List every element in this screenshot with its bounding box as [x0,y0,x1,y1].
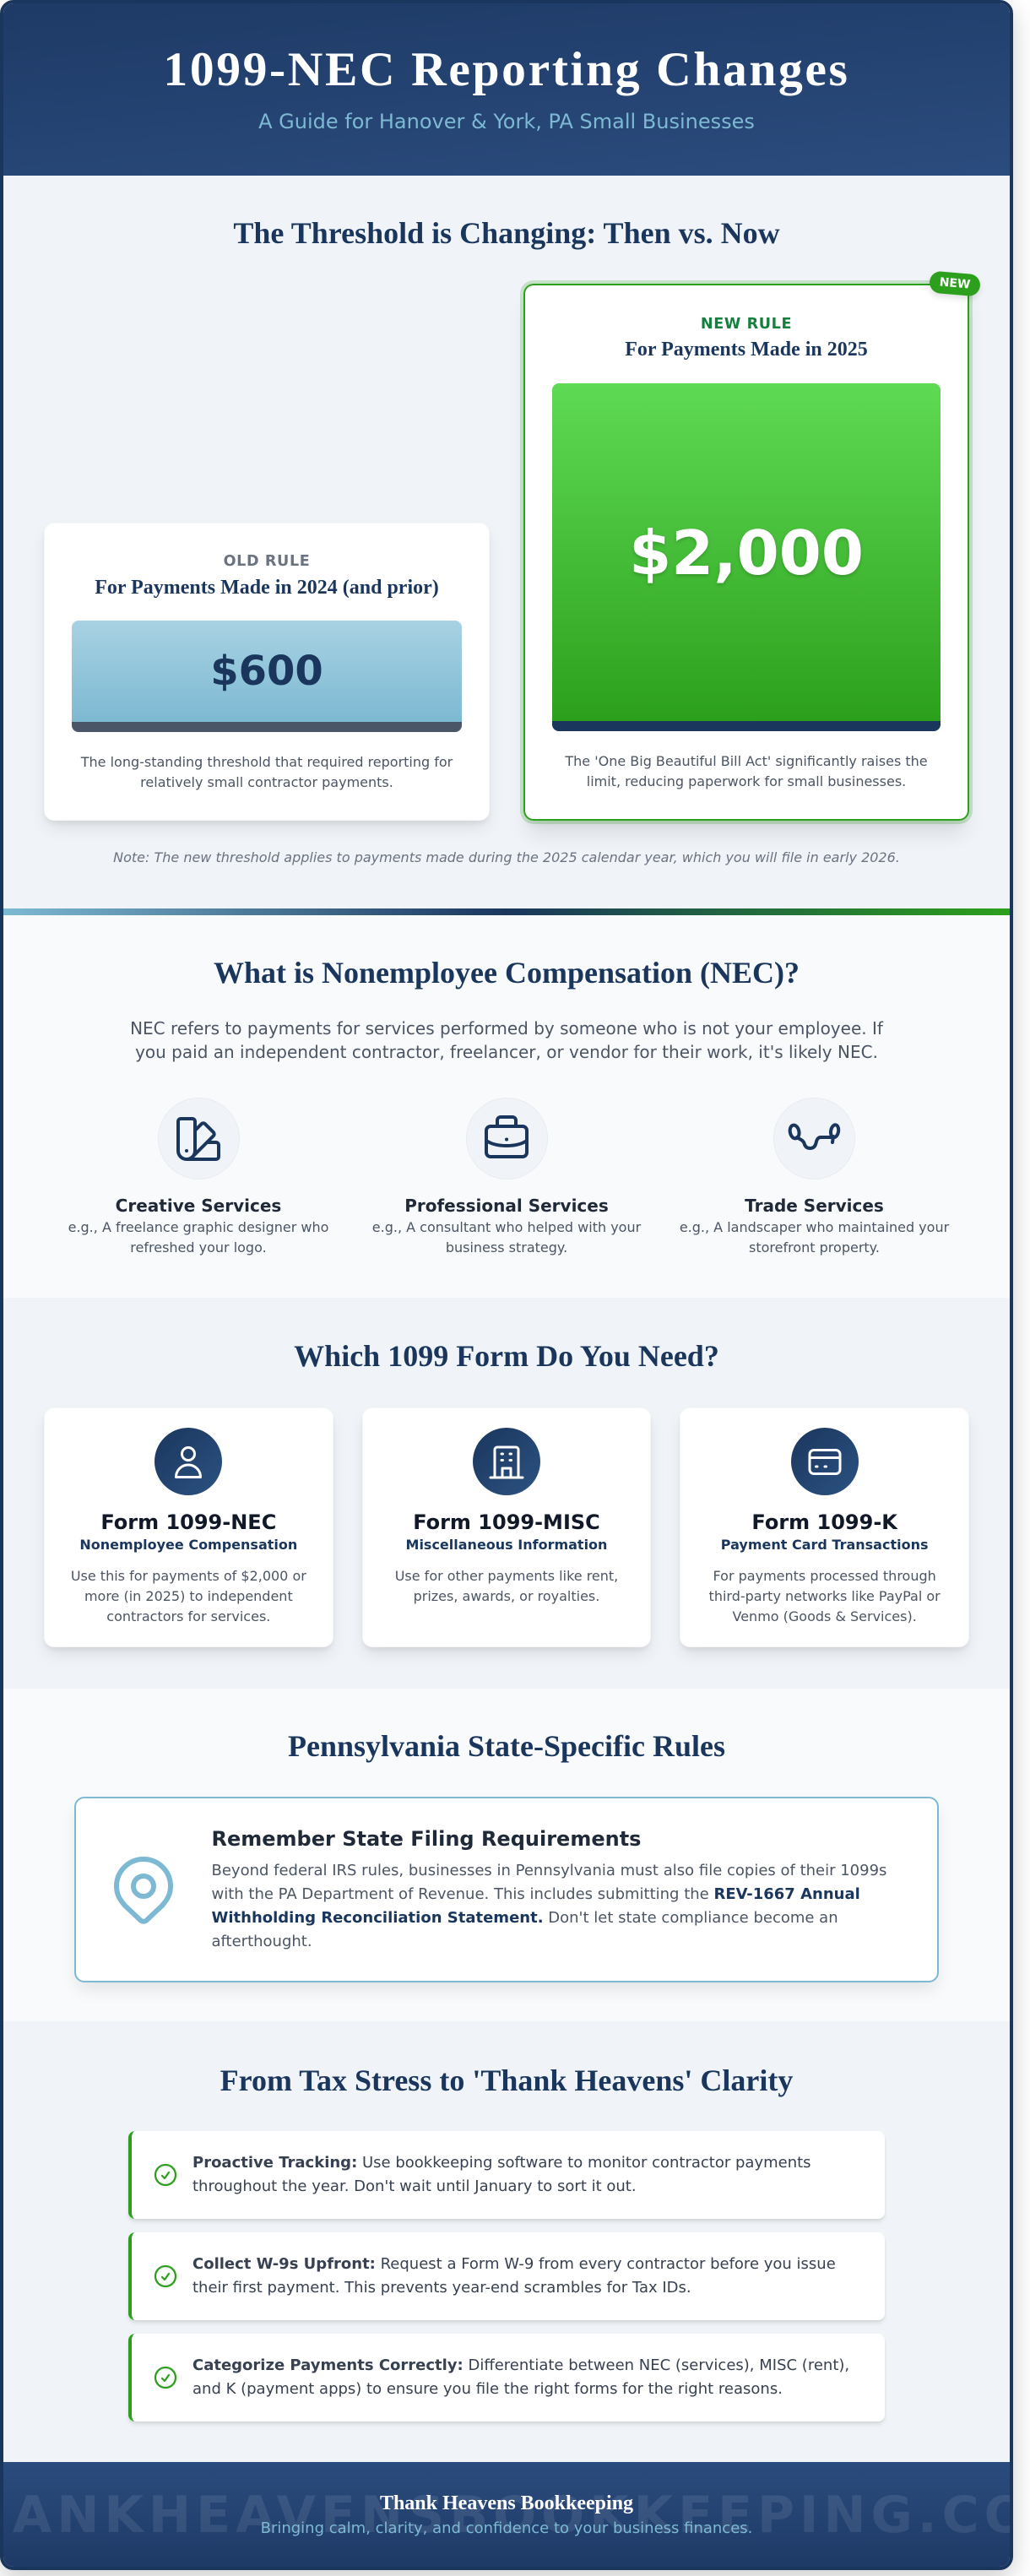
title: 1099-NEC Reporting Changes [163,43,850,96]
form description: contractors for services. [106,1608,270,1624]
icon: person [154,1428,222,1495]
icon: trade services [773,1098,855,1180]
icon: building [473,1428,540,1495]
form description: more (in 2025) to independent [84,1588,293,1604]
heading: NEC: What is Nonemployee Compensation (NEC)? [214,956,800,990]
bar: $2,000: $2,000 [629,518,864,588]
heading: forms: Which 1099 Form Do You Need? [294,1339,719,1373]
form name: Form 1099-K [751,1510,897,1534]
tip: collect W-9s: Collect W-9s Upfront: Request a Form W-9 from every contractor before you issue [192,2255,836,2273]
callout: state filing [74,1797,939,1982]
old rule label: OLD RULE [224,553,310,570]
card: form 1099-K [680,1407,969,1647]
trade services name: Trade Services [745,1196,884,1216]
form description: Use this for payments of $2,000 or [71,1568,306,1584]
form subtitle: Miscellaneous Information [406,1537,607,1553]
callout body: afterthought. [211,1933,312,1950]
footer [3,2462,1010,2567]
old rule description: relatively small contractor payments. [140,774,393,790]
callout body: Beyond federal IRS rules, businesses in Pennsylvania must also file copies of their 1099s [211,1862,886,1879]
professional services example [372,1219,642,1255]
new rule description: limit, reducing paperwork for small businesses. [587,773,906,789]
panel: which form [3,1298,1010,1689]
panel: new rule card [523,284,969,821]
intro paragraph [130,1018,883,1062]
panel: old rule card [44,523,490,821]
new rule label: NEW RULE [701,316,792,333]
tip: collect W-9s: their first payment. This prevents year-end scrambles for Tax IDs. [192,2279,691,2297]
form description [709,1568,941,1624]
header banner [3,3,1010,176]
form description [71,1568,306,1624]
callout body: with the PA Department of Revenue. This includes submitting the REV-1667 Annual [211,1885,860,1903]
new rule description [565,753,928,789]
heading: threshold: The Threshold is Changing: Then vs. Now [233,216,780,250]
old rule description: The long-standing threshold that required reporting for [81,754,453,770]
heading: clarity: From Tax Stress to 'Thank Heavens' Clarity [220,2064,793,2097]
form subtitle: Payment Card Transactions [721,1537,929,1553]
panel: Pennsylvania rules [3,1689,1010,2021]
card: form 1099-NEC [44,1407,333,1647]
new badge: NEW [939,275,971,292]
creative services example: refreshed your logo. [130,1239,267,1255]
bar: $600: $600 [210,648,323,695]
brand name: Thank Heavens Bookkeeping [380,2492,633,2514]
trade services example: e.g., A landscaper who maintained your [680,1219,949,1235]
tagline: Bringing calm, clarity, and confidence to your business finances. [261,2519,752,2537]
trade services example [680,1219,949,1255]
tip: categorize payments: and K (payment apps) to ensure you file the right forms for the right reasons. [192,2380,783,2398]
panel: what is NEC [3,915,1010,1298]
professional services example: e.g., A consultant who helped with your [372,1219,641,1235]
trade services example: storefront property. [749,1239,880,1255]
new rule description: The 'One Big Beautiful Bill Act' significantly raises the [565,753,928,769]
bar: $2,000 [552,383,941,731]
creative services name: Creative Services [116,1196,281,1216]
tip: proactive tracking [128,2131,885,2219]
card: form 1099-MISC [362,1407,651,1647]
bar: $600 [72,621,462,732]
form subtitle: Nonemployee Compensation [79,1537,297,1553]
icon: professional services briefcase [466,1098,547,1180]
form description: Use for other payments like rent, [395,1568,618,1584]
tip: categorize payments [128,2334,885,2421]
intro paragraph: NEC refers to payments for services performed by someone who is not your employee. If [130,1018,883,1039]
heading: Pennsylvania: Pennsylvania State-Specific Rules [288,1729,725,1763]
tip: categorize payments: Categorize Payments Correctly: Differentiate between NEC (services), MISC (rent), [192,2356,849,2374]
panel: threshold comparison [3,176,1010,908]
icon: payment card [791,1428,859,1495]
new rule heading: For Payments Made in 2025 [625,339,868,361]
creative services example: e.g., A freelance graphic designer who [68,1219,328,1235]
callout heading: Remember State Filing Requirements [211,1827,641,1851]
old rule description [81,754,453,790]
icon: creative services swatch [157,1098,240,1180]
footnote: Note: The new threshold applies to payments made during the 2025 calendar year, which you will file in early 2026. [113,849,900,865]
tip: proactive tracking: Proactive Tracking: Use bookkeeping software to monitor contractor payments [192,2154,811,2172]
form name: Form 1099-NEC [100,1510,276,1534]
old rule heading: For Payments Made in 2024 (and prior) [95,577,439,599]
icon: map pin [114,1857,173,1924]
form description: prizes, awards, or royalties. [414,1588,599,1604]
panel: clarity tips [3,2021,1010,2462]
subtitle: A Guide for Hanover & York, PA Small Businesses [258,110,755,133]
tip: proactive tracking: throughout the year. Don't wait until January to sort it out. [192,2177,637,2195]
callout body [211,1862,886,1950]
intro paragraph: you paid an independent contractor, freelancer, or vendor for their work, it's likely NEC. [135,1042,878,1062]
professional services example: business strategy. [446,1239,567,1255]
form description: For payments processed through [713,1568,936,1584]
new badge [929,270,981,297]
callout body: Withholding Reconciliation Statement. Don't let state compliance become an [211,1909,838,1927]
creative services example [68,1219,328,1255]
form description: Venmo (Goods & Services). [733,1608,917,1624]
form description [395,1568,618,1604]
form name: Form 1099-MISC [413,1510,600,1534]
tip: collect W-9s [128,2232,885,2320]
professional services name: Professional Services [404,1196,609,1216]
form description: third-party networks like PayPal or [709,1588,941,1604]
